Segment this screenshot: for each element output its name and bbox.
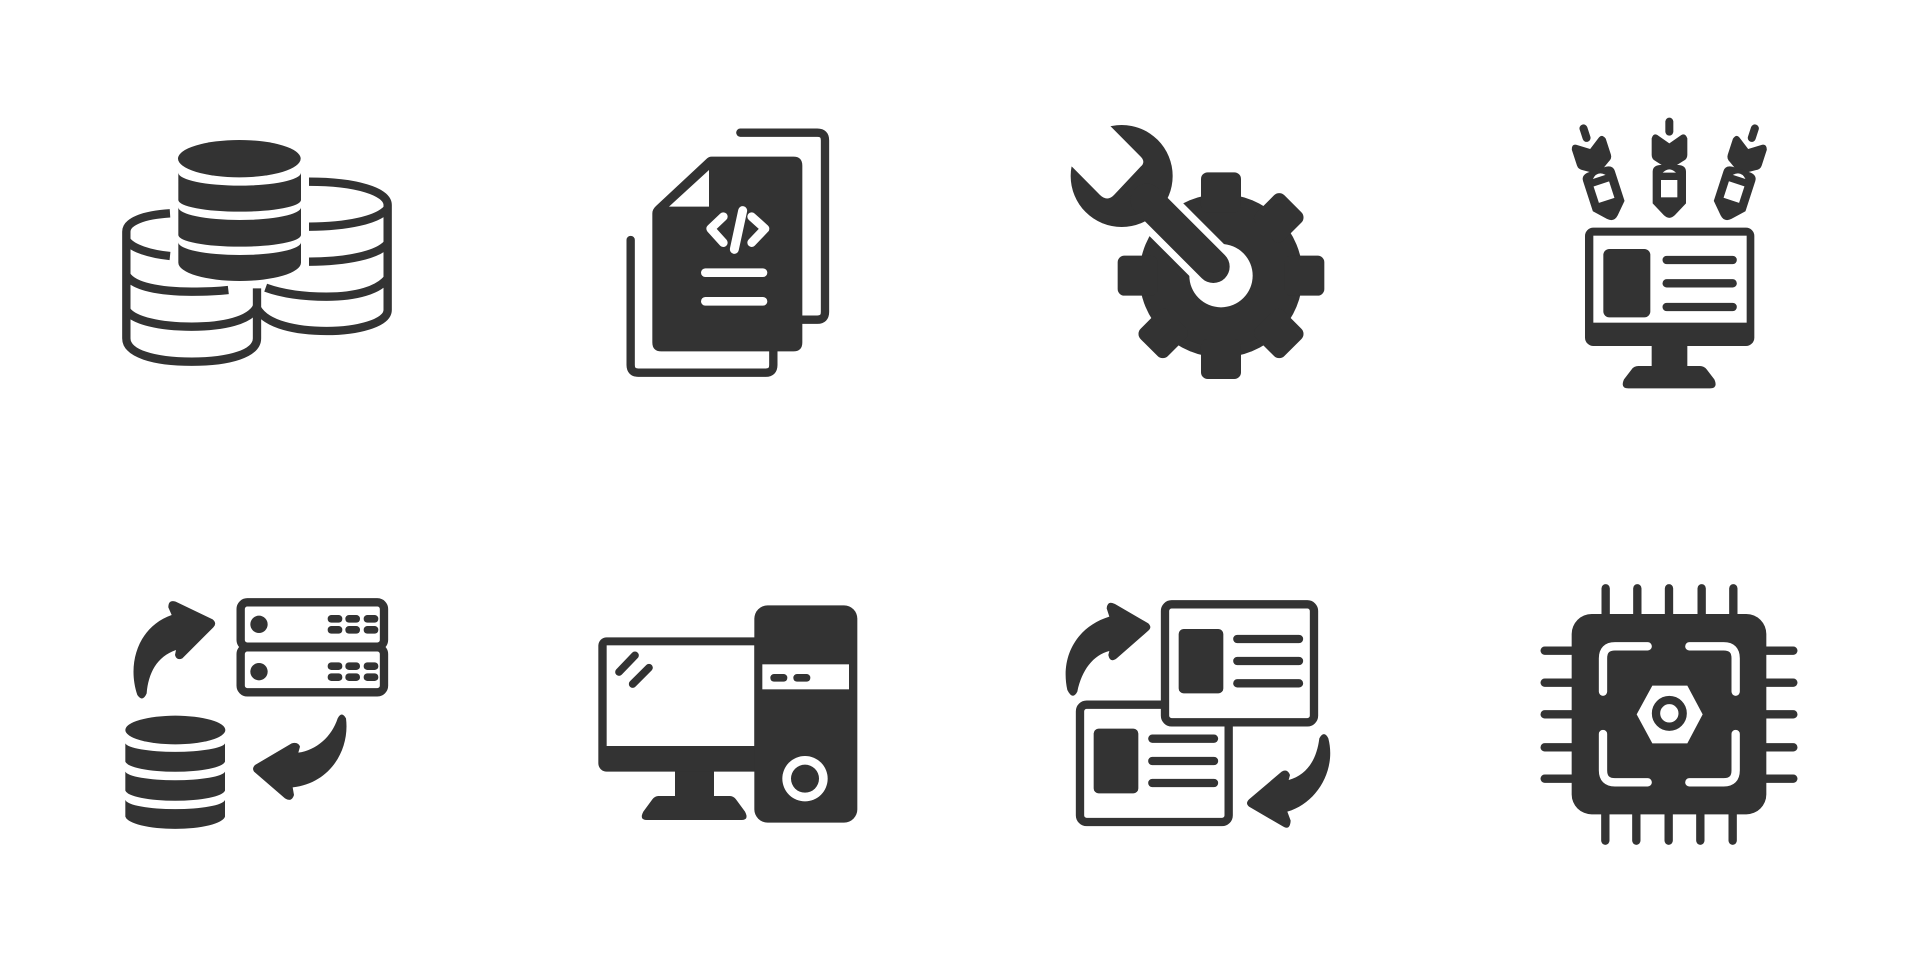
icon: bombs over monitor [1567, 122, 1772, 388]
icon: wrench and gear [1060, 113, 1324, 379]
icon: database stacks [126, 140, 388, 362]
icon: desktop computer [598, 605, 857, 823]
bomb: right [1708, 123, 1772, 225]
icon: server and database sync [125, 601, 384, 829]
icon: code documents [631, 133, 825, 373]
bomb: left [1567, 123, 1630, 225]
bomb: centre [1652, 122, 1687, 218]
icon: swapping cards [1066, 603, 1330, 828]
icon: cpu chip [1545, 588, 1793, 841]
